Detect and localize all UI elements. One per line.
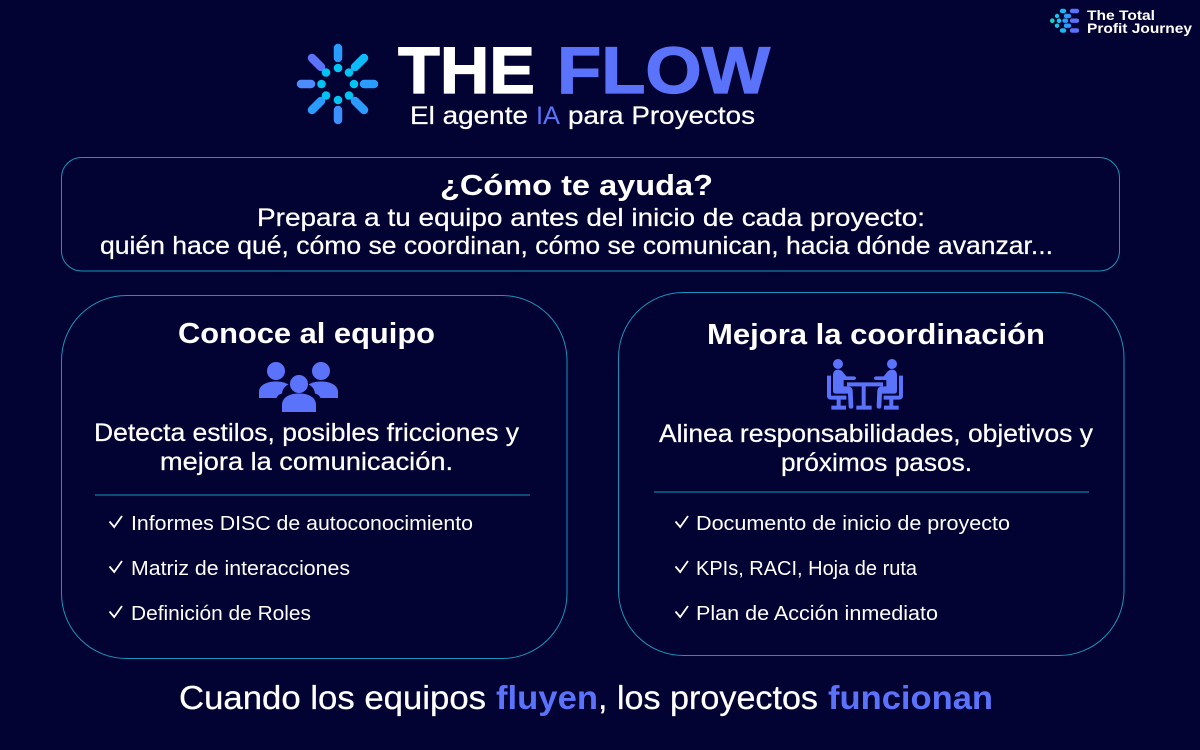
logo text: Profit Journey [1087, 20, 1192, 36]
footer tagline: Cuando los equipos [179, 679, 486, 716]
checklist: Definición de Roles [131, 603, 311, 625]
logo icon [1050, 11, 1077, 30]
checklist: Plan de Acción inmediato [696, 603, 938, 625]
text: description: Prepara a tu equipo antes del inicio de cada proyecto: [257, 204, 925, 232]
text: description [659, 420, 1094, 477]
title [398, 33, 771, 107]
subtitle: IA [536, 102, 560, 130]
checklist: Informes DISC de autoconocimiento [131, 513, 473, 535]
heading: conoce al equipo: Conoce al equipo [178, 318, 435, 350]
text: description: quién hace qué, cómo se coordinan, cómo se comunican, hacia dónde avanzar... [100, 232, 1053, 260]
heading: cómo te ayuda: ¿Cómo te ayuda? [440, 170, 713, 202]
panel: cómo te ayuda [62, 158, 1120, 271]
subtitle: para Proyectos [568, 102, 755, 130]
subtitle [410, 102, 755, 130]
icon: team [259, 362, 338, 412]
heading: mejora la coordinación: Mejora la coordinación [707, 319, 1045, 351]
text: description: mejora la comunicación. [160, 448, 453, 476]
footer tagline: funcionan [828, 679, 993, 716]
footer tagline [179, 679, 993, 716]
subtitle: El agente [410, 102, 528, 130]
panel: mejora la coordinación [618, 292, 1124, 656]
logo: The Total Profit Journey [1050, 7, 1192, 36]
icon: meeting at table [829, 359, 901, 409]
text: description: próximos pasos. [781, 449, 972, 477]
checklist: KPIs, RACI, Hoja de ruta [696, 558, 918, 580]
logo text: The Total [1087, 7, 1155, 23]
footer tagline: fluyen [496, 679, 598, 716]
title: FLOW [557, 33, 771, 107]
checklist [676, 513, 1010, 625]
panel: conoce al equipo [62, 296, 567, 658]
text: description: Alinea responsabilidades, objetivos y [659, 420, 1094, 448]
checklist [110, 513, 473, 625]
text: description: Detecta estilos, posibles fricciones y [94, 419, 520, 447]
icon: flow star [301, 48, 374, 120]
title: THE [398, 33, 535, 107]
logo text [1087, 7, 1192, 36]
checklist: Matriz de interacciones [131, 558, 350, 580]
footer tagline: , los proyectos [598, 679, 818, 716]
text: description [100, 204, 1053, 260]
text: description [94, 419, 520, 476]
checklist: Documento de inicio de proyecto [696, 513, 1010, 535]
